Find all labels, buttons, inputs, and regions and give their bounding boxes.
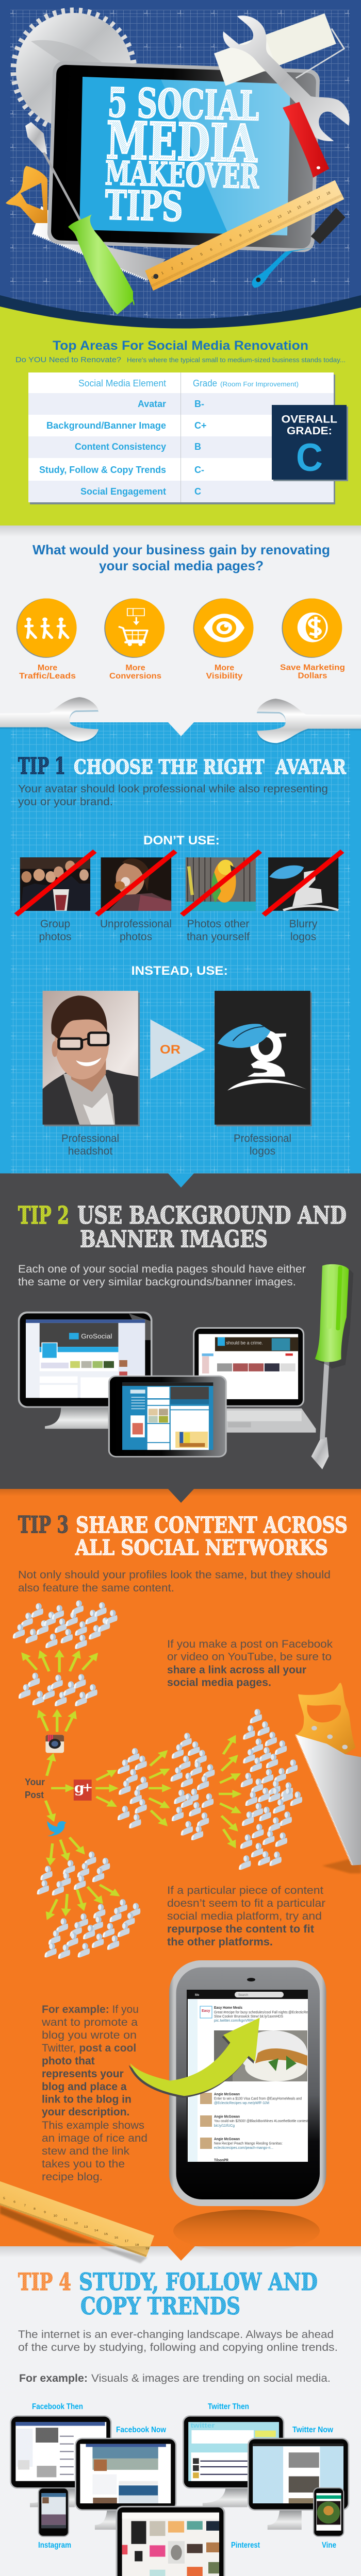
icon: instagram [45, 1735, 64, 1753]
icon: more conversions [104, 598, 165, 658]
subheading note: Here's where the typical small to medium-sized business stands today... [127, 356, 346, 364]
icon: ruler numbers: 16 [306, 200, 311, 206]
text: for example: stew and the link [42, 2145, 130, 2157]
labels: benefits: Traffic/Leads [19, 672, 76, 681]
icon: ruler numbers: 12 [267, 219, 273, 224]
icon: ruler numbers: 14 [287, 210, 292, 215]
table: grades: Background/Banner Image [46, 420, 166, 431]
text: for example: photo that [42, 2055, 95, 2067]
labels: benefits: Conversions [109, 672, 161, 681]
icon: ruler: 11 [64, 2218, 68, 2222]
people: twitter clusters [37, 1852, 140, 1959]
icon: ruler: 18 [135, 2243, 139, 2247]
text: for example: blog you wrote on [42, 2029, 137, 2041]
text: share a link: share a link across all your [167, 1664, 306, 1676]
labels: benefits: Visibility [206, 672, 243, 681]
icon: laptop [193, 1327, 316, 1433]
icon: ruler numbers: 7 [220, 243, 223, 247]
heading: your social media pages? [99, 558, 264, 573]
icon: phone with tweets: bit.ly/11IfUCg [214, 2124, 235, 2128]
heading: What would your business gain by renovating [32, 542, 330, 557]
label: or: OR [160, 1043, 180, 1057]
icon: wrench left [0, 697, 99, 743]
labels: good avatars: headshot [68, 1145, 112, 1157]
panel: tip 1 [0, 697, 361, 1174]
labels: benefits: More [125, 664, 145, 672]
device: twitter then: twitter [191, 2421, 215, 2429]
panel: tip 3 [0, 1489, 361, 2263]
device: vine phone [313, 2487, 344, 2537]
text: for example: represents your [42, 2068, 124, 2080]
devices: then and now [10, 2415, 349, 2576]
icon: phone with tweets: Easy [202, 2009, 210, 2013]
icon: ruler numbers: 5 [200, 252, 203, 257]
icon: ruler numbers: 3 [180, 262, 184, 266]
device: instagram phone [38, 2487, 69, 2537]
heading: tip 3: TIP 3 [18, 1511, 69, 1538]
icon: ruler: 8 [34, 2207, 36, 2211]
title: 5 social media makeover tips: MAKEOVER [105, 154, 260, 196]
icon: google plus: g [74, 1780, 85, 1795]
icon: ruler: 7 [24, 2204, 26, 2207]
icon: ruler numbers: 11 [258, 224, 262, 229]
heading [32, 542, 330, 573]
labels: good avatars: logos [250, 1145, 275, 1157]
text: for example: your description. [42, 2106, 129, 2118]
icon: ruler: 17 [125, 2240, 129, 2243]
title: 5 social media makeover tips [105, 79, 260, 231]
icon: wrench [223, 15, 350, 141]
text: repurpose: doesn’t seem to fit a particular [167, 1897, 325, 1909]
icon: screwdriver [25, 122, 135, 314]
subheading: Do YOU Need to Renovate? [15, 355, 121, 364]
text: for example: Twitter, post a cool [42, 2042, 136, 2054]
text: share a link: social media pages. [167, 1677, 271, 1689]
people: google plus clusters [118, 1709, 302, 1870]
arrows: to instagram cluster [39, 1711, 75, 1776]
text: for example: link to the blog in [42, 2094, 132, 2105]
text: intro: The internet is an ever-changing landscape. Always be ahead [18, 2329, 334, 2341]
photos: good avatars [43, 991, 311, 1126]
people: top cluster [13, 1600, 118, 1649]
text: intro: Not only should your profiles look the same, but they should [18, 1569, 331, 1581]
callout: overall grade [272, 405, 348, 481]
icon: ruler: 16 [114, 2236, 119, 2240]
icon: save dollars [282, 598, 342, 658]
labels: bad avatars: Photos other [187, 918, 250, 930]
icon: phone with tweets: Angie McGowan [214, 2093, 240, 2096]
labels: devices: Twitter Then [208, 2402, 249, 2411]
labels: bad avatars: Unprofessional [100, 918, 172, 930]
icon: tablet [108, 1376, 227, 1458]
icon: ruler numbers: 17 [316, 196, 321, 201]
labels: benefits: Dollars [298, 672, 327, 680]
label: post: Post [25, 1790, 44, 1800]
labels: good avatars: Professional [61, 1132, 119, 1145]
icon: tablet [47, 61, 320, 252]
text: intro: the same or very similar backgrounds/banner images. [18, 1276, 296, 1288]
icon: ruler numbers [151, 191, 331, 280]
tools in zoomed coordinates [25, 13, 350, 314]
text: for example: want to promote a [41, 2016, 138, 2028]
text: for example: takes you to the [42, 2158, 125, 2170]
photo: professional headshot [43, 991, 140, 1126]
panel: top areas for renovation [0, 307, 361, 526]
icon: circular saw [13, 10, 134, 131]
labels: bad avatars: logos [290, 931, 316, 943]
text: share a link: or video on YouTube, be sure to [167, 1651, 332, 1663]
diagram: sharing network upper [13, 1600, 361, 1959]
text: for example: This example shows [42, 2120, 144, 2131]
heading: tip 2: TIP 2 [18, 1201, 69, 1230]
table: grades: (Room For Improvement) [220, 380, 299, 388]
icon: twitter bird [47, 1821, 67, 1836]
icon: phone with tweets: Search [238, 1994, 248, 1997]
heading: tip 3 [18, 1511, 348, 1560]
text: repurpose: repurpose the content to fit [167, 1923, 314, 1935]
device: twitter then [183, 2415, 284, 2507]
icon: paint brush [252, 208, 346, 288]
table: grades: C [194, 486, 201, 497]
photo: professional logo [215, 991, 311, 1126]
notch [168, 722, 194, 736]
icon: ruler: 15 [104, 2232, 108, 2236]
text: for example: For example: If you [42, 2004, 139, 2015]
icon: phone with tweets: Great #recipe for busy schedules/cool Fall nights:@EclecticRe [214, 2011, 308, 2014]
labels: good avatars [61, 1132, 291, 1157]
label: your post: Your [25, 1777, 45, 1787]
labels: devices: Twitter Now [292, 2426, 334, 2434]
panel: what would your business gain [0, 526, 361, 722]
icon: ruler: 13 [84, 2225, 88, 2229]
icon: ruler numbers: 0 [151, 276, 155, 280]
text: for example [41, 2004, 147, 2183]
heading: Top Areas For Social Media Renovation [53, 338, 308, 353]
icon: ruler: 10 [53, 2214, 57, 2217]
icon: ruler: 6 [13, 2200, 16, 2204]
labels: bad avatars: than yourself [187, 931, 250, 943]
icon: more visibility [193, 598, 253, 658]
curved navy band [0, 295, 361, 330]
heading: tip 4 [18, 2268, 318, 2320]
icon: ruler numbers: 9 [239, 234, 242, 238]
callout: overall grade: C [296, 436, 323, 480]
labels: devices [32, 2402, 336, 2550]
icon: wrench right [257, 699, 361, 744]
icon: phone with tweets [169, 1960, 326, 2252]
text: intro: Each one of your social media pages should have either [18, 1263, 306, 1275]
icon: traffic circles [17, 598, 342, 658]
table: grades [28, 372, 335, 504]
text: intro: also feature the same content. [18, 1582, 174, 1594]
table: grades: B [194, 442, 201, 452]
icon: monitor [18, 1312, 153, 1429]
callout: overall grade: GRADE: [287, 425, 332, 437]
table: grades: Social Media Element [78, 378, 166, 388]
labels: devices: Facebook Now [116, 2426, 167, 2434]
icon: google plus [74, 1780, 92, 1801]
icon: phone with tweets: Enter to win a $100 Visa Card from @EasyHomeMeals and [214, 2097, 302, 2101]
icon: ruler numbers: 15 [297, 205, 302, 210]
arrow: big curved arrow to link [129, 2018, 260, 2098]
notch [168, 1489, 194, 1503]
table: grades: Study, Follow & Copy Trends [39, 465, 166, 475]
icon: ruler numbers: 2 [171, 266, 174, 270]
text: for example: Visuals & images are trending on social media. [91, 2372, 331, 2384]
panel: tip 2 [0, 1174, 361, 1489]
text: intro: of the curve by studying, following and copying online trends. [18, 2342, 338, 2353]
heading: tip 4: COPY TRENDS [80, 2292, 240, 2320]
icon: ruler numbers: 1 [161, 272, 165, 276]
icon: ruler numbers: 6 [210, 248, 213, 252]
title: 5 social media makeover tips: TIPS [105, 182, 184, 231]
photo: group [20, 857, 90, 911]
table: grades: C+ [194, 420, 207, 431]
text: for example: blog and place a [42, 2081, 127, 2093]
icon: phone with tweets: pic.twitter.com/kgxVRPoxt [214, 2019, 258, 2023]
text: for example: an image of rice and [42, 2132, 147, 2144]
heading: tip 2: BANNER IMAGES [80, 1225, 268, 1253]
labels: bad avatars: Blurry [289, 918, 318, 930]
panel: tip 4 [0, 2246, 361, 2576]
icon: laptop: should be a crime. [226, 1341, 263, 1346]
text: intro [18, 1569, 331, 1594]
icon: screwdriver [311, 1264, 353, 1469]
people: middle cluster [19, 1673, 97, 1706]
labels: benefits: More [38, 664, 57, 672]
icon: ruler numbers: 8 [229, 239, 233, 243]
photo: blurry logo [268, 857, 338, 911]
callout: overall grade: OVERALL [282, 413, 337, 426]
text: intro [18, 1263, 306, 1288]
icon: ruler numbers: 13 [277, 214, 282, 219]
text: for example: recipe blog. [42, 2171, 103, 2183]
text: repurpose: If a particular piece of content [167, 1885, 323, 1896]
notch [168, 2246, 195, 2261]
icon: monitor: GroSocial [81, 1333, 112, 1341]
heading: instead use: INSTEAD, USE: [131, 964, 228, 978]
icon: red handle [283, 102, 329, 178]
labels: bad avatars [39, 918, 318, 943]
text: for example: For example: [19, 2372, 88, 2384]
labels: benefits [19, 664, 345, 681]
device: twitter now [248, 2438, 349, 2530]
labels: good avatars: Professional [234, 1132, 291, 1145]
arrow: or [150, 1020, 205, 1079]
arrows: top fan [23, 1651, 96, 1672]
text: repurpose: social media platform, try and [167, 1910, 322, 1922]
icon: ruler: 19 [145, 2247, 150, 2250]
text: share a link: If you make a post on Facebook [167, 1638, 333, 1650]
labels: devices: Vine [322, 2541, 336, 2550]
icon: more traffic [17, 598, 77, 658]
photo: parrot [186, 857, 256, 911]
icon: phone with tweets: New Recipe! Peach Mango Riesling Granitas: [214, 2142, 283, 2145]
table: grades: Content Consistency [75, 442, 166, 452]
icon: ruler [0, 2181, 154, 2263]
table: grades: B- [194, 399, 204, 409]
text: intro: you or your brand. [18, 796, 113, 808]
icon: phone with tweets: Angie McGowan [214, 2115, 240, 2119]
table: grades: C- [194, 465, 204, 475]
icon: phone with tweets: You could win $2500! @BlackBoxWines #LosetheBottle contest [214, 2120, 308, 2123]
text: intro [18, 783, 328, 808]
icon: phone with tweets: Angie McGowan [214, 2138, 240, 2141]
icon: ruler numbers: 18 [326, 191, 331, 196]
devices [18, 1264, 353, 1469]
icon: ruler [145, 180, 344, 291]
text: intro: Your avatar should look professional while also representing [18, 783, 328, 795]
arrows: your post to google plus [45, 1737, 239, 1919]
device: facebook now [75, 2438, 176, 2530]
device: facebook then [10, 2415, 112, 2507]
heading: tip 2 [18, 1201, 347, 1253]
labels: benefits: More [215, 664, 234, 672]
notch [168, 1174, 194, 1188]
text: repurpose [167, 1885, 325, 1948]
photos: bad avatars [16, 851, 342, 915]
labels: devices: Pinterest [231, 2541, 260, 2550]
icon: ruler: 5 [3, 2197, 6, 2200]
heading: tip 1: TIP 1 [18, 753, 65, 779]
text: repurpose: the other platforms. [167, 1936, 273, 1948]
icon: phone with tweets: TilsonPR [214, 2159, 228, 2162]
panel: hero [0, 0, 361, 330]
table: grades: Avatar [138, 399, 166, 409]
title: 5 social media makeover tips: MEDIA [105, 110, 258, 174]
text: share a link [167, 1638, 333, 1689]
text: intro [18, 2329, 338, 2353]
labels: bad avatars: photos [39, 931, 72, 943]
icon: ruler: 12 [74, 2222, 78, 2225]
icon: paint roller [214, 13, 344, 86]
icon: phone with tweets: eclecticrecipes.com/peach-mango-ri... [214, 2146, 273, 2150]
icon: phone with tweets: Me [195, 1994, 200, 1997]
labels: bad avatars: Group [40, 918, 70, 930]
device: pinterest laptop [105, 2506, 237, 2576]
heading: don't use: DON’T USE: [143, 834, 220, 848]
icon: phone with tweets: Slow Cooker Brunswick Stew! bit.ly/1axmHDS [214, 2015, 283, 2019]
photo: unprofessional [101, 857, 171, 911]
labels: benefits: Save Marketing [280, 664, 345, 672]
icon: ruler: 14 [94, 2229, 99, 2232]
labels: devices: Instagram [38, 2541, 71, 2550]
icon: ruler: 9 [44, 2211, 46, 2214]
icon: phone with tweets: Easy Home Meals [214, 2006, 242, 2010]
icon: ruler numbers: 10 [248, 229, 253, 233]
icon: hand saw [6, 166, 166, 280]
table: grades: Grade [193, 378, 217, 388]
title: 5 social media makeover tips: 5 SOCIAL [107, 79, 260, 130]
labels: bad avatars: photos [120, 931, 152, 943]
icon: hand saw [296, 1683, 361, 1873]
icon: red slashes [16, 851, 342, 915]
labels: devices: Facebook Then [32, 2402, 83, 2411]
heading: tip 4: TIP 4 [18, 2268, 71, 2296]
table: grades: Social Engagement [80, 486, 166, 497]
icon: phone with tweets: @EclecticRecipes wp.me/pWfF-3JM [214, 2102, 269, 2105]
icon: ruler numbers: 4 [190, 257, 193, 261]
